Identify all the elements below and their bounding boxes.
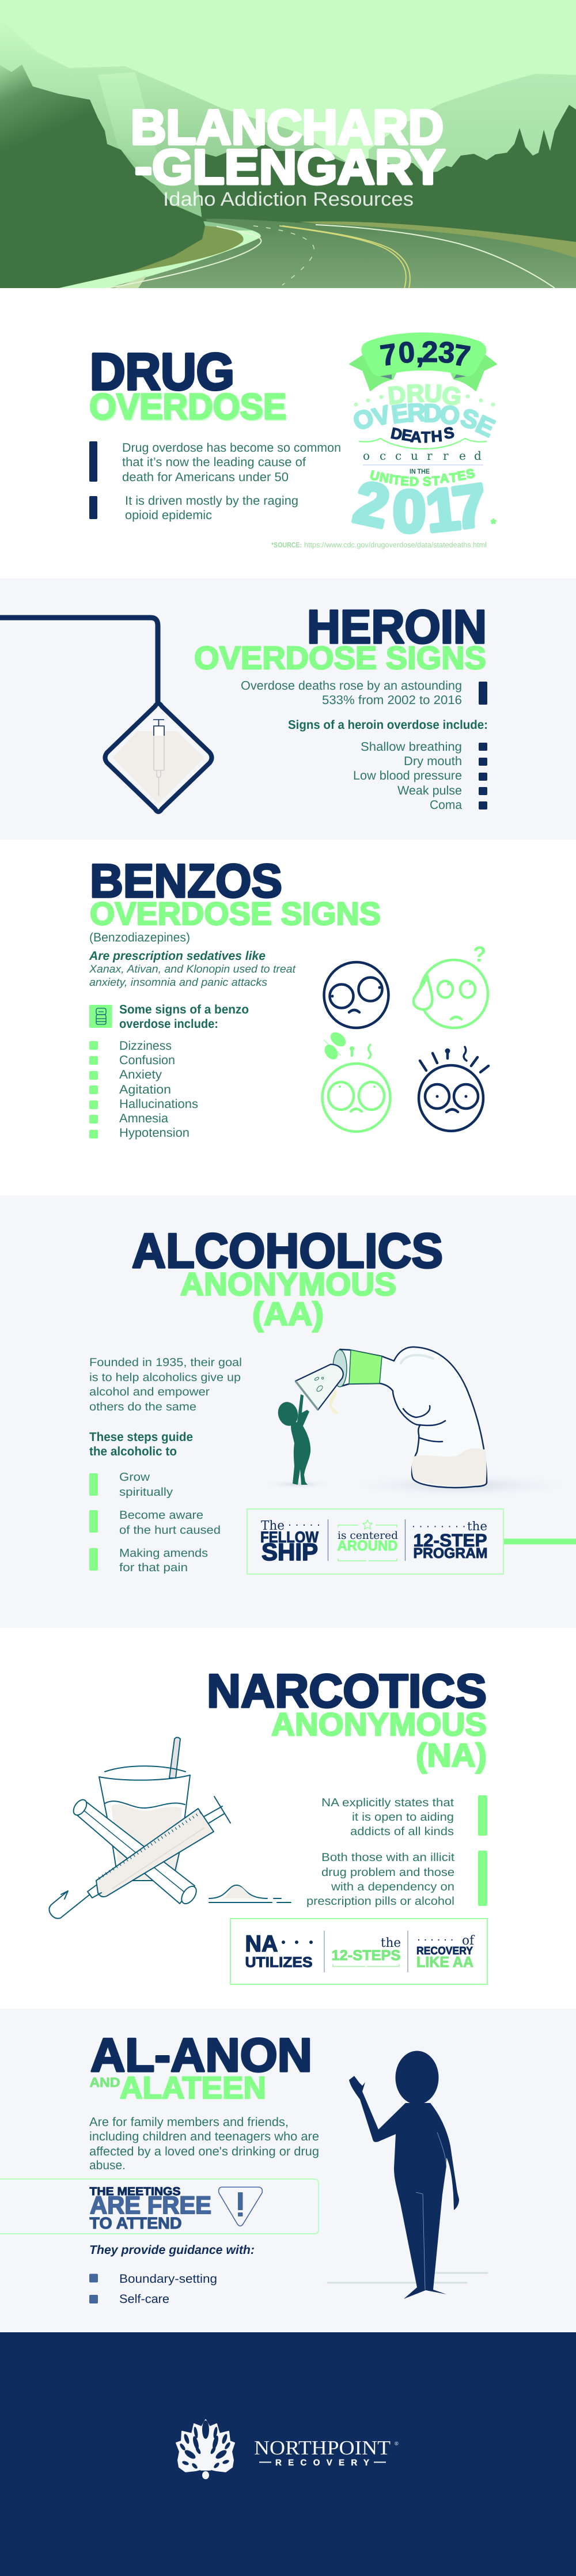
source note: https://www.cdc.gov/drugoverdose/data/statedeaths.html (304, 540, 487, 549)
text: the 12-steps (332, 1936, 401, 1966)
subheading: some signs: overdose include: (119, 1017, 218, 1031)
text block: illicit and prescription: prescription pills or alcohol (306, 1895, 454, 1908)
list: steps: Grow (119, 1471, 150, 1484)
number: 70,237 (378, 335, 472, 373)
illustration: glass, tube, syringe and powder (49, 1738, 291, 1919)
text block: leading cause: death for Americans under 50 (122, 470, 289, 484)
icon: face anxious (419, 1047, 488, 1131)
asterisk: * (491, 516, 497, 532)
text: of recovery like aa (416, 1934, 475, 1970)
logo wordmark: NORTHPOINT (254, 2437, 391, 2459)
heading: alcoholics anonymous: ANONYMOUS (180, 1266, 396, 1302)
list: benzo signs: Confusion (119, 1053, 175, 1067)
heading: alcoholics anonymous: ALCOHOLICS (132, 1224, 443, 1278)
logo wordmark: RECOVERY (275, 2458, 369, 2468)
heading: al-anon and alateen: AND (90, 2075, 120, 2090)
panel: hero (0, 0, 576, 288)
dots (354, 394, 495, 407)
text block: open to all addicts (321, 1795, 487, 1838)
source note: *SOURCE: (271, 541, 302, 549)
text block: illicit and prescription (306, 1851, 487, 1908)
text: the fellowship (260, 1519, 320, 1565)
list: steps: of the hurt caused (119, 1524, 221, 1537)
list: guidance (89, 2272, 217, 2306)
list: steps: Become aware (119, 1509, 203, 1522)
hero photo: mountain road (0, 19, 576, 288)
list: heroin signs (353, 740, 487, 812)
text: is centered around: is centered (338, 1530, 398, 1542)
list: benzo signs: Amnesia (119, 1111, 168, 1125)
text block: opioid epidemic: opioid epidemic (125, 508, 212, 522)
text: the fellowship: FELLOW (260, 1529, 319, 1546)
logo wordmark (254, 2437, 399, 2468)
text block: deaths rose: 533% from 2002 to 2016 (322, 693, 462, 707)
heading: al-anon and alateen (90, 2029, 312, 2105)
list: heroin signs: Coma (430, 798, 462, 812)
text: is centered around (338, 1520, 398, 1561)
callout: meetings are free (0, 2179, 319, 2234)
heading: narcotics anonymous: NARCOTICS (207, 1665, 487, 1718)
word: occurred: occurred (363, 449, 482, 463)
text block: sedatives: Xanax, Ativan, and Klonopin used to treat (89, 963, 296, 975)
ribbon (350, 332, 497, 391)
text block: open to all addicts: it is open to aiding (352, 1811, 454, 1824)
text block: leading cause: that it’s now the leading cause of (122, 455, 306, 469)
heading: drug overdose: DRUG (90, 343, 234, 401)
text block: open to all addicts: NA explicitly states that (321, 1796, 454, 1809)
callout: meetings are free: TO ATTEND (90, 2214, 182, 2232)
list: guidance: Self-care (119, 2293, 169, 2306)
text block: opioid epidemic (89, 494, 298, 522)
text block: illicit and prescription: with a dependency on (331, 1881, 454, 1893)
word: in the: IN THE (410, 467, 430, 475)
word: united states: UNITED STATES (369, 466, 476, 489)
list: heroin signs: Shallow breathing (361, 740, 462, 754)
text block: founded: alcohol and empower (89, 1386, 210, 1398)
connector bar (503, 1538, 576, 1544)
list: heroin signs: Dry mouth (404, 754, 462, 768)
heading: heroin: OVERDOSE SIGNS (194, 640, 486, 676)
text block: founded (89, 1356, 242, 1413)
list: steps: Making amends (119, 1547, 208, 1560)
heading: alcoholics anonymous: (AA) (252, 1296, 324, 1333)
icon: syringe in diamond on a line (0, 618, 212, 812)
heading: benzos: OVERDOSE SIGNS (90, 895, 381, 932)
list: steps (89, 1471, 221, 1574)
panel: footer (0, 2332, 576, 2576)
heading: alcoholics anonymous (132, 1224, 443, 1333)
callout: na utilizes (230, 1919, 487, 1984)
callout: fellowship (247, 1509, 503, 1574)
subtitle: Idaho Addiction Resources (163, 188, 414, 210)
list: steps: for that pain (119, 1561, 188, 1574)
illustration: person pouring out a giant bottle (260, 1347, 576, 1498)
illustration: waving person (328, 2051, 487, 2299)
text block: open to all addicts: addicts of all kinds (350, 1825, 454, 1838)
list: benzo signs: Agitation (119, 1083, 171, 1096)
heading: benzos (90, 855, 381, 932)
list: benzo signs: Anxiety (119, 1068, 162, 1081)
text block: opioid epidemic: It is driven mostly by the raging (125, 494, 298, 508)
text: of recovery like aa: RECOVERY (416, 1945, 473, 1957)
text: na utilizes (245, 1931, 313, 1970)
text: the fellowship: SHIP (262, 1538, 318, 1565)
word: drug: DRUG (386, 380, 463, 411)
text block: who it is for (89, 2115, 319, 2172)
panel: heroin (0, 578, 576, 839)
title: -GLENGARY (135, 140, 445, 195)
text: the 12-step program: the (467, 1519, 487, 1533)
word: overdose: OVERDOSE (350, 398, 499, 442)
list: heroin signs: Low blood pressure (353, 769, 462, 782)
list: benzo signs: Hallucinations (119, 1097, 198, 1111)
logo: northpoint peacock (176, 2420, 234, 2479)
list: benzo signs (89, 1039, 198, 1140)
list: guidance: Boundary-setting (119, 2272, 217, 2286)
text block: founded: Founded in 1935, their goal (89, 1356, 242, 1369)
logo wordmark: ® (395, 2441, 399, 2446)
heading: drug overdose: OVERDOSE (89, 387, 286, 427)
icon: face sweating, confused: ? (473, 943, 486, 967)
text: the 12-step program: 12-STEP (414, 1530, 487, 1550)
heading: drug overdose (89, 343, 287, 428)
subheading: some signs (119, 1003, 249, 1031)
text block: illicit and prescription: Both those with an illicit (321, 1851, 454, 1864)
heading: al-anon and alateen: ALATEEN (120, 2071, 266, 2105)
panel: drug overdose (0, 288, 576, 578)
title: BLANCHARD (131, 100, 444, 155)
text: the 12-step program (413, 1519, 487, 1561)
divider (363, 464, 483, 466)
text: na utilizes: NA (245, 1931, 278, 1957)
text: the 12-step program: PROGRAM (414, 1545, 487, 1561)
text block: sedatives: Are prescription sedatives like (89, 949, 266, 963)
heading: heroin (194, 601, 487, 676)
text block: leading cause (89, 441, 341, 484)
text: benzodiazepines: (Benzodiazepines) (89, 930, 190, 944)
subheading: guidance: They provide guidance with: (89, 2243, 255, 2257)
list: benzo signs: Hypotension (119, 1126, 190, 1140)
text: of recovery like aa: LIKE AA (416, 1953, 473, 1970)
text block: founded: others do the same (89, 1401, 196, 1413)
subheading: steps guide: the alcoholic to (89, 1444, 177, 1458)
list: steps: spiritually (119, 1486, 173, 1499)
heading: al-anon and alateen: AL-ANON (90, 2029, 312, 2082)
badge: 70,237 deaths (348, 332, 499, 544)
subheading: signs: Signs of a heroin overdose include: (288, 718, 488, 732)
panel: narcotics anonymous (0, 1628, 576, 2008)
panel: al-anon and alateen (0, 2008, 576, 2332)
heading: narcotics anonymous (207, 1665, 487, 1774)
year: 2017 (348, 468, 491, 544)
list: benzo signs: Dizziness (119, 1039, 172, 1053)
callout: meetings are free: THE MEETINGS (90, 2185, 181, 2198)
text: of recovery like aa: of (462, 1934, 475, 1948)
panel: benzos (0, 839, 576, 1196)
text block: who it is for: affected by a loved one's drinking or drug (89, 2144, 319, 2158)
list: heroin signs: Weak pulse (397, 784, 462, 797)
text: the 12-steps: 12-STEPS (332, 1947, 401, 1964)
icon: warning triangle (219, 2187, 262, 2226)
icon: pill bottle (89, 1005, 112, 1028)
icon: face hallucinating (322, 1030, 391, 1132)
icon: face dizzy eyes (324, 962, 388, 1028)
text block: who it is for: Are for family members and friends, (89, 2115, 289, 2129)
heading: drug overdose: OVERDOSE (90, 388, 287, 428)
subheading: steps guide (89, 1430, 193, 1458)
text: na utilizes: UTILIZES (245, 1954, 312, 1970)
text: the 12-steps: the (381, 1936, 401, 1950)
word: deaths: DEATHS (389, 423, 456, 446)
icon: face sweating, confused (414, 943, 488, 1028)
heading: heroin: HEROIN (307, 601, 487, 653)
swoosh (359, 438, 487, 449)
heading: benzos: BENZOS (90, 855, 282, 907)
text block: deaths rose: Overdose deaths rose by an astounding (241, 679, 462, 693)
callout: meetings are free: ARE FREE (90, 2192, 211, 2219)
text block: deaths rose (241, 679, 487, 707)
text block: who it is for: abuse. (89, 2158, 126, 2172)
heading: narcotics anonymous: (NA) (416, 1737, 487, 1774)
text: the fellowship: The (261, 1519, 285, 1533)
text block: sedatives: anxiety, insomnia and panic attacks (89, 977, 268, 989)
title (131, 100, 445, 195)
subheading: some signs: Some signs of a benzo (119, 1003, 249, 1016)
text: is centered around: AROUND (338, 1538, 397, 1554)
subheading: steps guide: These steps guide (89, 1430, 193, 1444)
text block: leading cause: Drug overdose has become so common (122, 441, 341, 455)
text block: illicit and prescription: drug problem and those (321, 1866, 454, 1879)
text block: who it is for: including children and teenagers who are (89, 2129, 319, 2143)
heading: narcotics anonymous: ANONYMOUS (271, 1706, 487, 1742)
text block: sedatives (89, 949, 296, 989)
panel: alcoholics anonymous (0, 1196, 576, 1628)
text block: founded: is to help alcoholics give up (89, 1371, 241, 1384)
